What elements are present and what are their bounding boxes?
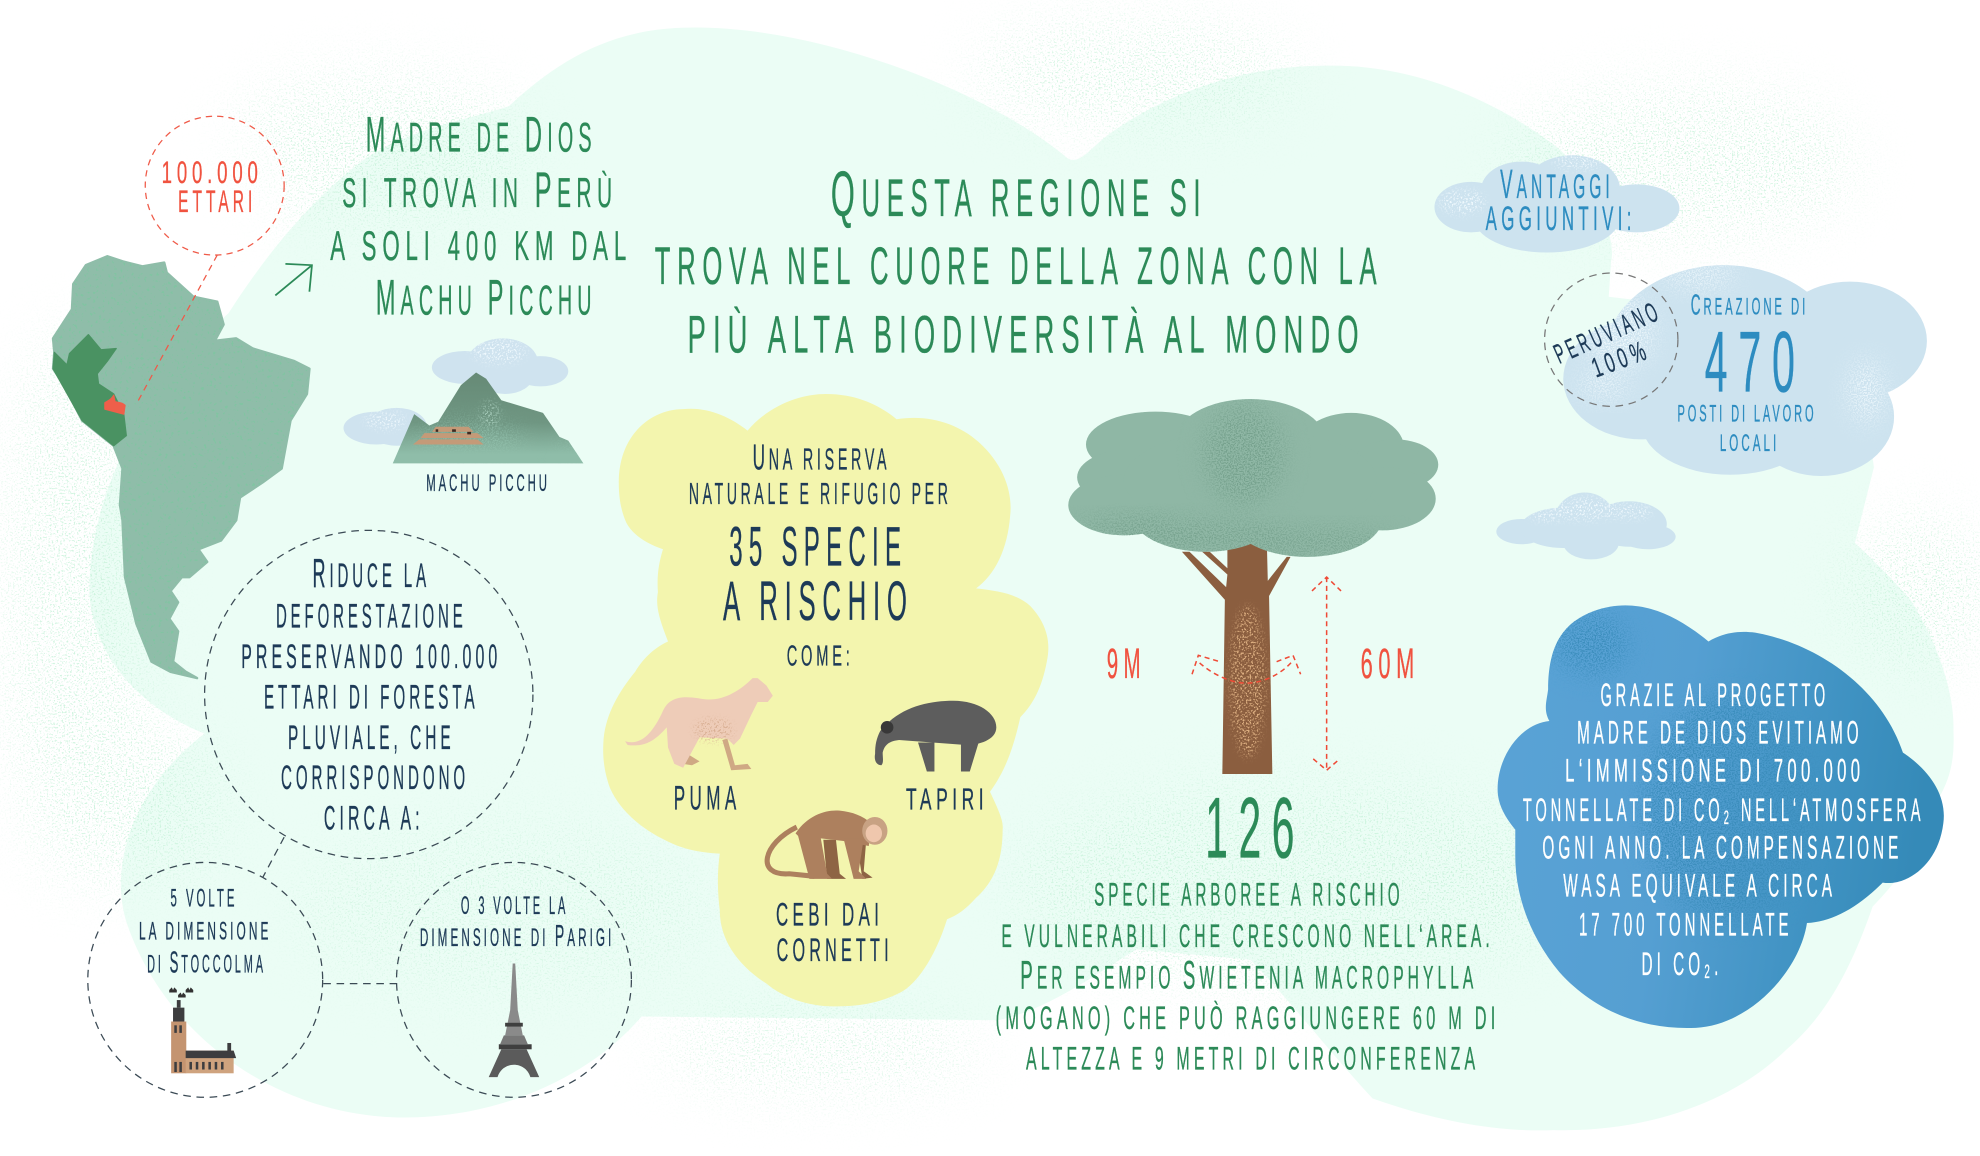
connectors <box>263 837 397 984</box>
south america map <box>38 253 316 682</box>
panel: specie a rischio (yellow blob): CORNETTI <box>777 931 893 968</box>
heading: Madre de Dios: SI TROVA IN PERÙ <box>342 162 618 218</box>
text: specie arboree: PER ESEMPIO SWIETENIA MACROPHYLLA <box>1020 954 1477 998</box>
panel: Parigi: DIMENSIONE DI PARIGI <box>420 920 614 953</box>
panel: specie a rischio (yellow blob): A RISCHIO <box>723 570 914 632</box>
panel: riduce la deforestazione: CORRISPONDONO <box>281 759 469 797</box>
tree canopy <box>1068 399 1438 557</box>
panel: riduce la deforestazione: PRESERVANDO 100.000 <box>241 638 501 676</box>
illustration: Machu Picchu mountain <box>343 338 586 467</box>
heading: title: QUESTA REGIONE SI <box>831 159 1207 230</box>
icon: tapir <box>875 701 996 772</box>
panel: Parigi <box>397 862 631 1097</box>
cloud: vantaggi aggiuntivi: VANTAGGI <box>1500 161 1614 207</box>
panel: riduce la deforestazione: RIDUCE LA <box>313 550 430 596</box>
callout: 100.000 ettari: ETTARI <box>178 183 256 219</box>
label: cebi dai cornetti: CEBI DAI <box>776 896 883 933</box>
panel: specie a rischio (yellow blob): COME: <box>787 640 854 672</box>
panel: Parigi: O 3 VOLTE LA <box>461 892 568 920</box>
panel: specie a rischio (yellow blob): PUMA <box>674 779 741 817</box>
map: Madre de Dios <box>105 395 125 414</box>
callout: 100.000 ettari: 100.000 <box>162 154 263 190</box>
trunk texture <box>1230 606 1265 758</box>
text: specie arboree: SPECIE ARBOREE A RISCHIO <box>1094 875 1404 912</box>
heading: Madre de Dios: A SOLI 400 KM DAL <box>330 222 632 269</box>
cloud: posti di lavoro <box>1545 263 1927 476</box>
illustration: tree <box>1068 399 1438 774</box>
heading: title: PIÙ ALTA BIODIVERSITÀ AL MONDO <box>688 305 1366 364</box>
label: cebi dai cornetti <box>776 896 893 968</box>
panel: riduce la deforestazione: DEFORESTAZIONE <box>276 598 467 636</box>
panel: specie a rischio (yellow blob) <box>603 394 1048 1006</box>
heading: Madre de Dios: MACHU PICCHU <box>376 269 597 325</box>
panel: specie a rischio (yellow blob): NATURALE E RIFUGIO PER <box>689 478 951 511</box>
panel: riduce la deforestazione: ETTARI DI FORESTA <box>264 678 479 716</box>
cloud: vantaggi aggiuntivi: AGGIUNTIVI: <box>1486 200 1636 238</box>
cloud: posti di lavoro: LOCALI <box>1720 430 1779 457</box>
cloud: vantaggi aggiuntivi <box>1434 154 1679 253</box>
tree trunk <box>1182 530 1291 774</box>
heading: Madre de Dios <box>330 107 632 325</box>
measure: height 60m: 60M <box>1361 640 1420 688</box>
icon: monkey <box>767 810 887 879</box>
panel: specie a rischio (yellow blob): UNA RISERVA <box>753 437 890 478</box>
callout: 100.000 ettari <box>136 116 284 404</box>
cloud: posti di lavoro: 470 <box>1705 314 1806 410</box>
panel: riduce la deforestazione <box>205 530 533 859</box>
icon: puma <box>625 678 773 770</box>
heading: title <box>655 159 1383 364</box>
panel: Stoccolma <box>88 862 323 1097</box>
panel: Stoccolma: LA DIMENSIONE <box>139 917 272 945</box>
panel: CO2 (blue blob) <box>1498 605 1944 1028</box>
text: 126 <box>1205 780 1305 876</box>
panel: riduce la deforestazione: PLUVIALE, CHE <box>288 719 455 757</box>
cloud: posti di lavoro: CREAZIONE DI <box>1691 289 1808 321</box>
panel: CO2 (blue blob): DI CO₂. <box>1642 945 1722 982</box>
measure: girth 9m <box>1107 640 1301 688</box>
arrow <box>275 264 312 295</box>
panel: specie a rischio (yellow blob): 35 SPECIE <box>729 516 907 578</box>
heading: Madre de Dios: MADRE DE DIOS <box>366 107 597 163</box>
icon: Eiffel tower <box>489 963 539 1077</box>
text: MACHU PICCHU <box>426 470 550 497</box>
badge: peruviano 100%: 100% <box>1587 334 1654 383</box>
badge: peruviano 100%: PERUVIANO <box>1549 295 1666 370</box>
cloud: posti di lavoro: POSTI DI LAVORO <box>1678 401 1816 428</box>
badge: peruviano 100% <box>1545 273 1678 406</box>
cloud: small <box>1496 492 1676 559</box>
text: specie arboree <box>996 875 1499 1077</box>
panel: Stoccolma: 5 VOLTE <box>171 885 237 913</box>
label: tapiri: TAPIRI <box>906 783 988 816</box>
measure: girth 9m: 9M <box>1107 640 1146 688</box>
panel: Stoccolma: DI STOCCOLMA <box>147 946 266 979</box>
icon: Stockholm city hall <box>169 987 236 1073</box>
text: specie arboree: ALTEZZA E 9 METRI DI CIRCONFERENZA <box>1026 1040 1479 1077</box>
map: Peru <box>53 335 126 446</box>
measure: height 60m <box>1312 577 1420 770</box>
panel: riduce la deforestazione: CIRCA A: <box>324 800 424 838</box>
